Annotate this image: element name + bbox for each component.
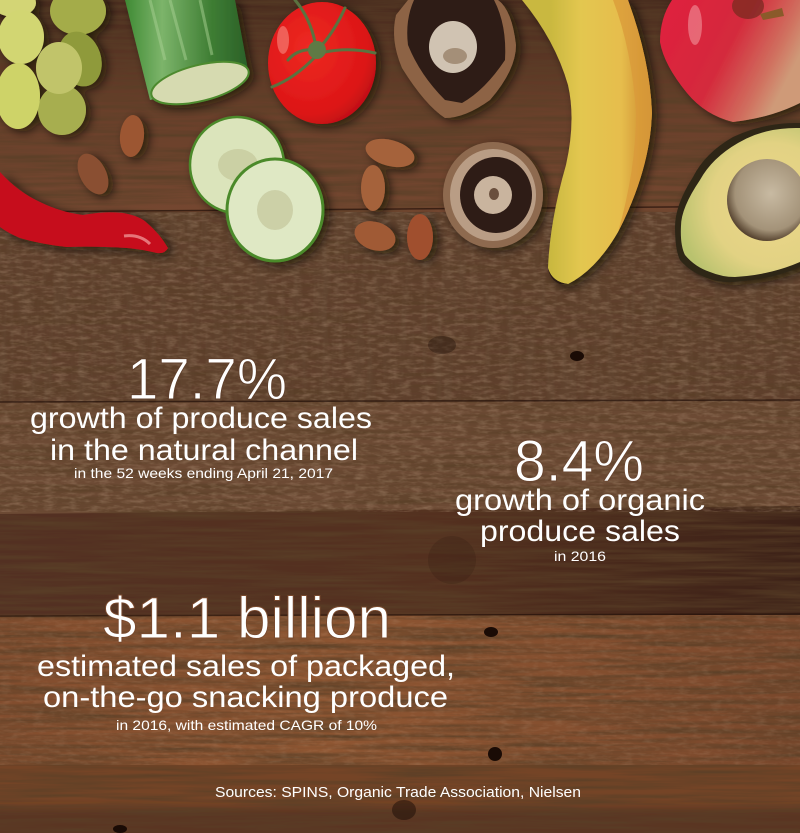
tomato <box>268 0 376 124</box>
stat: 8.4%: produce sales <box>480 515 680 548</box>
stat: $1.1 billion: on-the-go snacking produce <box>43 681 448 714</box>
stat: 17.7%: 17.7% <box>127 347 287 412</box>
stat: 8.4%: growth of organic <box>455 484 705 517</box>
avocado <box>675 123 800 282</box>
almonds <box>71 114 433 260</box>
apple <box>660 0 800 122</box>
stat: $1.1 billion <box>37 586 455 733</box>
middle mushroom <box>443 142 543 248</box>
stat: $1.1 billion: $1.1 billion <box>103 586 391 651</box>
chili pepper <box>0 172 168 253</box>
sources: Sources: SPINS, Organic Trade Association, Nielsen <box>215 784 581 801</box>
stat: 8.4% <box>455 429 705 564</box>
stat: 17.7%: in the natural channel <box>50 434 358 467</box>
cucumber piece <box>125 0 253 113</box>
stat: 8.4%: 8.4% <box>514 429 644 494</box>
banana <box>522 0 652 284</box>
cucumber slices <box>190 117 323 261</box>
stat: 17.7% <box>30 347 372 481</box>
stat: $1.1 billion: estimated sales of packaged, <box>37 650 455 683</box>
stat: 17.7%: growth of produce sales <box>30 402 372 435</box>
grapes <box>0 0 109 135</box>
stat: 17.7%: in the 52 weeks ending April 21, 2017 <box>74 465 333 481</box>
stat: 8.4%: in 2016 <box>554 548 606 564</box>
stat: $1.1 billion: in 2016, with estimated CAGR of 10% <box>116 717 377 733</box>
top mushroom <box>394 0 516 118</box>
